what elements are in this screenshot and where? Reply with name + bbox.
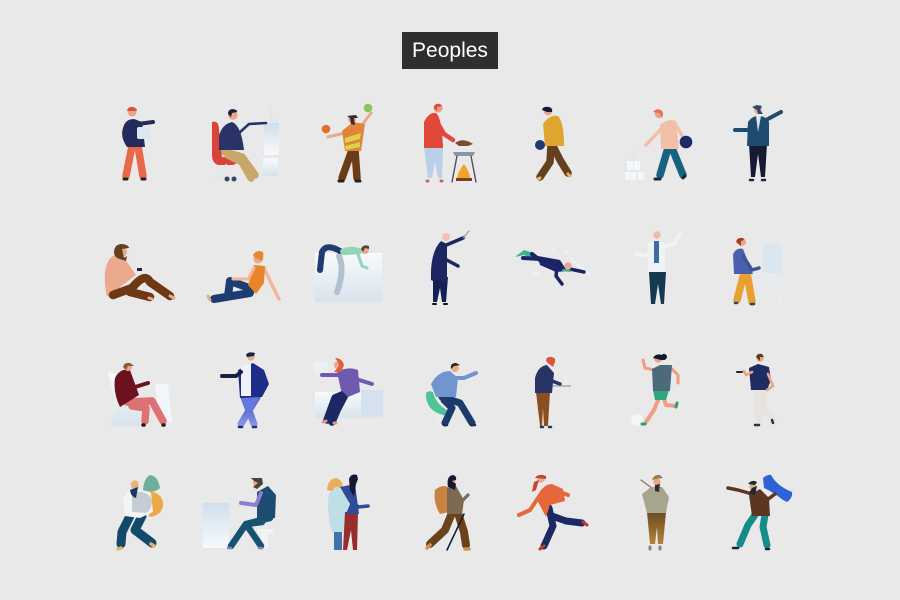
legs <box>740 515 767 545</box>
arm <box>452 373 476 378</box>
head <box>654 355 662 363</box>
beard <box>655 484 660 492</box>
legs <box>757 388 773 421</box>
backpack <box>435 486 449 514</box>
woman's coat <box>328 487 350 532</box>
legs <box>424 147 443 178</box>
torso <box>337 368 360 397</box>
jacket <box>238 363 269 398</box>
phone <box>137 268 142 271</box>
cap <box>127 107 137 111</box>
shirt <box>652 365 672 391</box>
shoes <box>733 548 769 549</box>
cap and beard <box>748 481 757 495</box>
arm <box>132 383 148 388</box>
head <box>361 246 369 254</box>
torso <box>543 116 564 146</box>
head <box>348 115 356 123</box>
torso <box>424 113 443 148</box>
legs <box>646 398 676 422</box>
torso <box>219 122 244 150</box>
tray <box>553 385 571 387</box>
front leg <box>320 247 340 270</box>
shoes <box>540 522 587 549</box>
legs <box>327 392 349 422</box>
head <box>254 254 262 264</box>
torso <box>105 254 136 297</box>
figure: man in blue jacket with crossed legs <box>222 352 269 427</box>
hair and beard <box>334 358 344 372</box>
machine <box>263 105 279 176</box>
head <box>749 483 757 491</box>
shoes <box>735 303 754 304</box>
shoes <box>538 174 570 179</box>
torso <box>257 486 276 519</box>
head <box>434 104 442 112</box>
cap <box>652 475 663 480</box>
fins <box>515 250 534 258</box>
shoes <box>444 424 475 426</box>
figure: man waving a blue flag <box>728 475 792 549</box>
legs <box>113 278 170 297</box>
legs <box>737 273 752 302</box>
torso <box>342 122 365 151</box>
shoes <box>642 403 677 424</box>
arm <box>138 122 153 124</box>
arm <box>546 372 560 384</box>
head <box>564 262 572 270</box>
coat <box>431 241 447 283</box>
figure: woman in purple on a sofa <box>313 358 383 423</box>
arm <box>241 493 261 505</box>
head <box>653 231 661 239</box>
legs <box>225 152 255 178</box>
arms <box>322 375 372 384</box>
chair wheels <box>224 176 236 182</box>
shoes <box>143 423 164 427</box>
figure: man with microphone <box>737 354 773 425</box>
head <box>547 357 555 365</box>
title: Peoples: Peoples <box>412 39 488 62</box>
man's hair and beard <box>349 474 358 497</box>
orange sack <box>149 491 163 517</box>
soccer ball <box>631 414 643 426</box>
hair <box>228 109 237 117</box>
bowling ball <box>535 140 545 150</box>
torso <box>447 486 464 514</box>
torso <box>660 120 679 149</box>
hat <box>130 480 139 485</box>
hair and beard <box>251 478 263 489</box>
green seat <box>426 391 449 416</box>
figure: person with ping-pong paddles <box>322 104 372 181</box>
torso <box>248 265 265 294</box>
figure: woman kicking a soccer ball <box>631 354 678 426</box>
head <box>334 361 342 369</box>
legs <box>536 392 550 426</box>
head <box>756 354 764 362</box>
arms <box>728 488 775 500</box>
beard <box>130 487 138 498</box>
head <box>537 475 545 483</box>
hair <box>246 352 255 357</box>
hair and beard <box>114 244 129 261</box>
man's torso <box>340 484 359 514</box>
hair <box>653 354 667 360</box>
arms <box>556 268 584 284</box>
glass <box>564 376 568 385</box>
hair <box>123 363 134 370</box>
figure: stout man with sack of plants <box>118 475 163 549</box>
stool <box>257 529 273 548</box>
arms <box>643 360 678 383</box>
grill <box>452 152 476 182</box>
torso <box>122 119 145 147</box>
arm <box>238 123 266 134</box>
figure: man at barbecue grill <box>424 104 476 182</box>
chair <box>108 372 140 426</box>
figure: scuba diver <box>515 250 590 284</box>
head <box>544 107 552 115</box>
head <box>448 478 456 486</box>
figure: old conductor in long navy coat <box>431 231 469 304</box>
hair <box>361 245 369 252</box>
figure: person in orange tank reclining <box>208 251 279 300</box>
hair and beard <box>546 357 555 367</box>
figure: man in blue suit with arms spread <box>735 105 781 180</box>
head <box>754 106 762 114</box>
legs <box>127 401 163 421</box>
food <box>455 140 473 146</box>
feet <box>149 296 174 299</box>
legs <box>540 146 568 177</box>
boots <box>427 545 469 549</box>
woman's legs <box>334 528 342 550</box>
hair <box>756 354 764 361</box>
arms <box>744 371 773 390</box>
hair <box>434 104 442 111</box>
shirt <box>756 116 761 132</box>
coat <box>648 240 665 272</box>
head <box>124 363 132 371</box>
machine <box>155 384 172 422</box>
red chair <box>212 122 237 165</box>
legs <box>749 144 767 177</box>
shirt <box>241 364 251 396</box>
feet <box>323 421 336 423</box>
figure: scientist in white coat <box>636 231 680 304</box>
torso <box>733 249 753 274</box>
shoes <box>239 426 256 428</box>
legs <box>241 397 257 424</box>
flag <box>763 475 792 502</box>
shoes <box>750 179 765 181</box>
legs <box>442 397 472 423</box>
figure: hunter with rifle <box>641 475 669 549</box>
torso <box>115 370 139 407</box>
arms <box>328 113 371 137</box>
figure: bowler in yellow sweater <box>535 107 570 179</box>
torso <box>431 371 458 397</box>
figure: painter at easel <box>733 238 782 305</box>
canvas <box>763 244 782 274</box>
shoes <box>433 303 447 305</box>
front arm <box>233 268 254 279</box>
shirt <box>654 241 659 263</box>
figure: bowler with pins <box>625 109 692 180</box>
beard and cap <box>347 115 358 125</box>
arm <box>436 120 453 140</box>
sofa <box>315 390 383 418</box>
legs <box>214 281 252 299</box>
shoes <box>541 426 551 428</box>
figure: bearded man sitting with phone <box>105 244 174 299</box>
shoes <box>339 180 360 182</box>
logs <box>456 178 472 181</box>
fire <box>457 164 470 178</box>
figure: person holding paper <box>122 107 153 179</box>
shoes <box>655 176 685 179</box>
bowling ball <box>680 136 692 148</box>
bubbles and lines <box>534 250 590 275</box>
man's arm <box>352 500 368 507</box>
green paddle <box>364 104 372 112</box>
arm back <box>264 268 279 299</box>
legs <box>523 254 541 261</box>
head <box>738 238 746 246</box>
legs <box>649 272 666 304</box>
coat <box>536 484 565 517</box>
legs <box>660 148 683 175</box>
hair <box>451 363 460 369</box>
shoes <box>755 420 773 425</box>
figure: man with tray and glass <box>535 357 571 427</box>
legs <box>231 518 270 546</box>
baton <box>463 231 469 238</box>
grey bag <box>132 492 152 513</box>
legs <box>433 277 448 302</box>
feet <box>427 180 442 182</box>
arms <box>646 124 683 145</box>
body <box>538 256 567 272</box>
jacket <box>747 116 769 146</box>
arms <box>443 238 463 266</box>
hat and scarf <box>532 475 546 492</box>
man's legs <box>343 512 358 550</box>
arm <box>743 256 759 270</box>
figure: embracing couple <box>327 474 368 550</box>
hiking pole <box>447 514 464 550</box>
easel <box>751 274 781 305</box>
orange paddle <box>322 125 330 133</box>
vest stripes <box>345 133 361 150</box>
torso <box>642 487 669 513</box>
shoes <box>124 178 145 180</box>
hat <box>253 251 263 261</box>
legs <box>430 513 466 545</box>
figure: man on green chair <box>426 363 476 425</box>
head <box>442 233 450 241</box>
arms <box>519 487 568 515</box>
head <box>451 364 459 372</box>
woman's hair <box>327 478 342 491</box>
hat and beard <box>752 105 763 114</box>
man's head <box>349 476 357 484</box>
shorts <box>653 390 669 400</box>
table <box>203 503 229 548</box>
figure: person in red chair at machine <box>212 105 279 182</box>
rifle <box>641 480 668 500</box>
mask <box>563 270 570 271</box>
boots <box>650 547 660 549</box>
title: Peoples <box>402 32 498 69</box>
seat base <box>436 415 446 425</box>
leaves <box>143 475 160 492</box>
head <box>253 479 261 487</box>
figure: person draped over a white box <box>315 245 382 302</box>
arms <box>735 112 781 130</box>
head <box>117 247 127 257</box>
torso <box>340 247 362 255</box>
head <box>247 353 255 361</box>
hair <box>653 109 663 118</box>
pins <box>625 148 644 180</box>
chair base <box>212 165 232 178</box>
figure: man in maroon hoodie on white chair <box>108 363 172 426</box>
back leg <box>337 256 342 292</box>
figure: orange-coated person running <box>519 475 587 549</box>
arm <box>358 254 367 268</box>
figure: hiker with backpack <box>427 475 469 550</box>
head <box>131 482 139 490</box>
torso <box>749 489 770 516</box>
hood and beard <box>448 475 456 490</box>
hair <box>736 238 744 246</box>
microphone <box>737 371 742 373</box>
head <box>655 110 663 118</box>
arms <box>636 234 680 256</box>
paper <box>137 127 150 139</box>
figure: man at white table on stool <box>203 478 276 548</box>
legs <box>342 150 357 178</box>
head <box>228 110 238 120</box>
legs <box>121 516 152 544</box>
torso <box>535 365 554 393</box>
legs <box>126 146 143 176</box>
arm <box>222 372 241 376</box>
legs <box>647 512 666 544</box>
box <box>315 253 382 302</box>
hair <box>542 107 552 112</box>
head <box>653 478 661 486</box>
shoes <box>228 547 262 549</box>
arm <box>456 492 468 503</box>
head <box>128 108 136 116</box>
legs <box>544 508 582 546</box>
foot <box>208 296 210 300</box>
body <box>123 489 153 518</box>
shoes <box>118 544 154 549</box>
pillow <box>313 361 328 373</box>
shirt <box>749 364 771 390</box>
